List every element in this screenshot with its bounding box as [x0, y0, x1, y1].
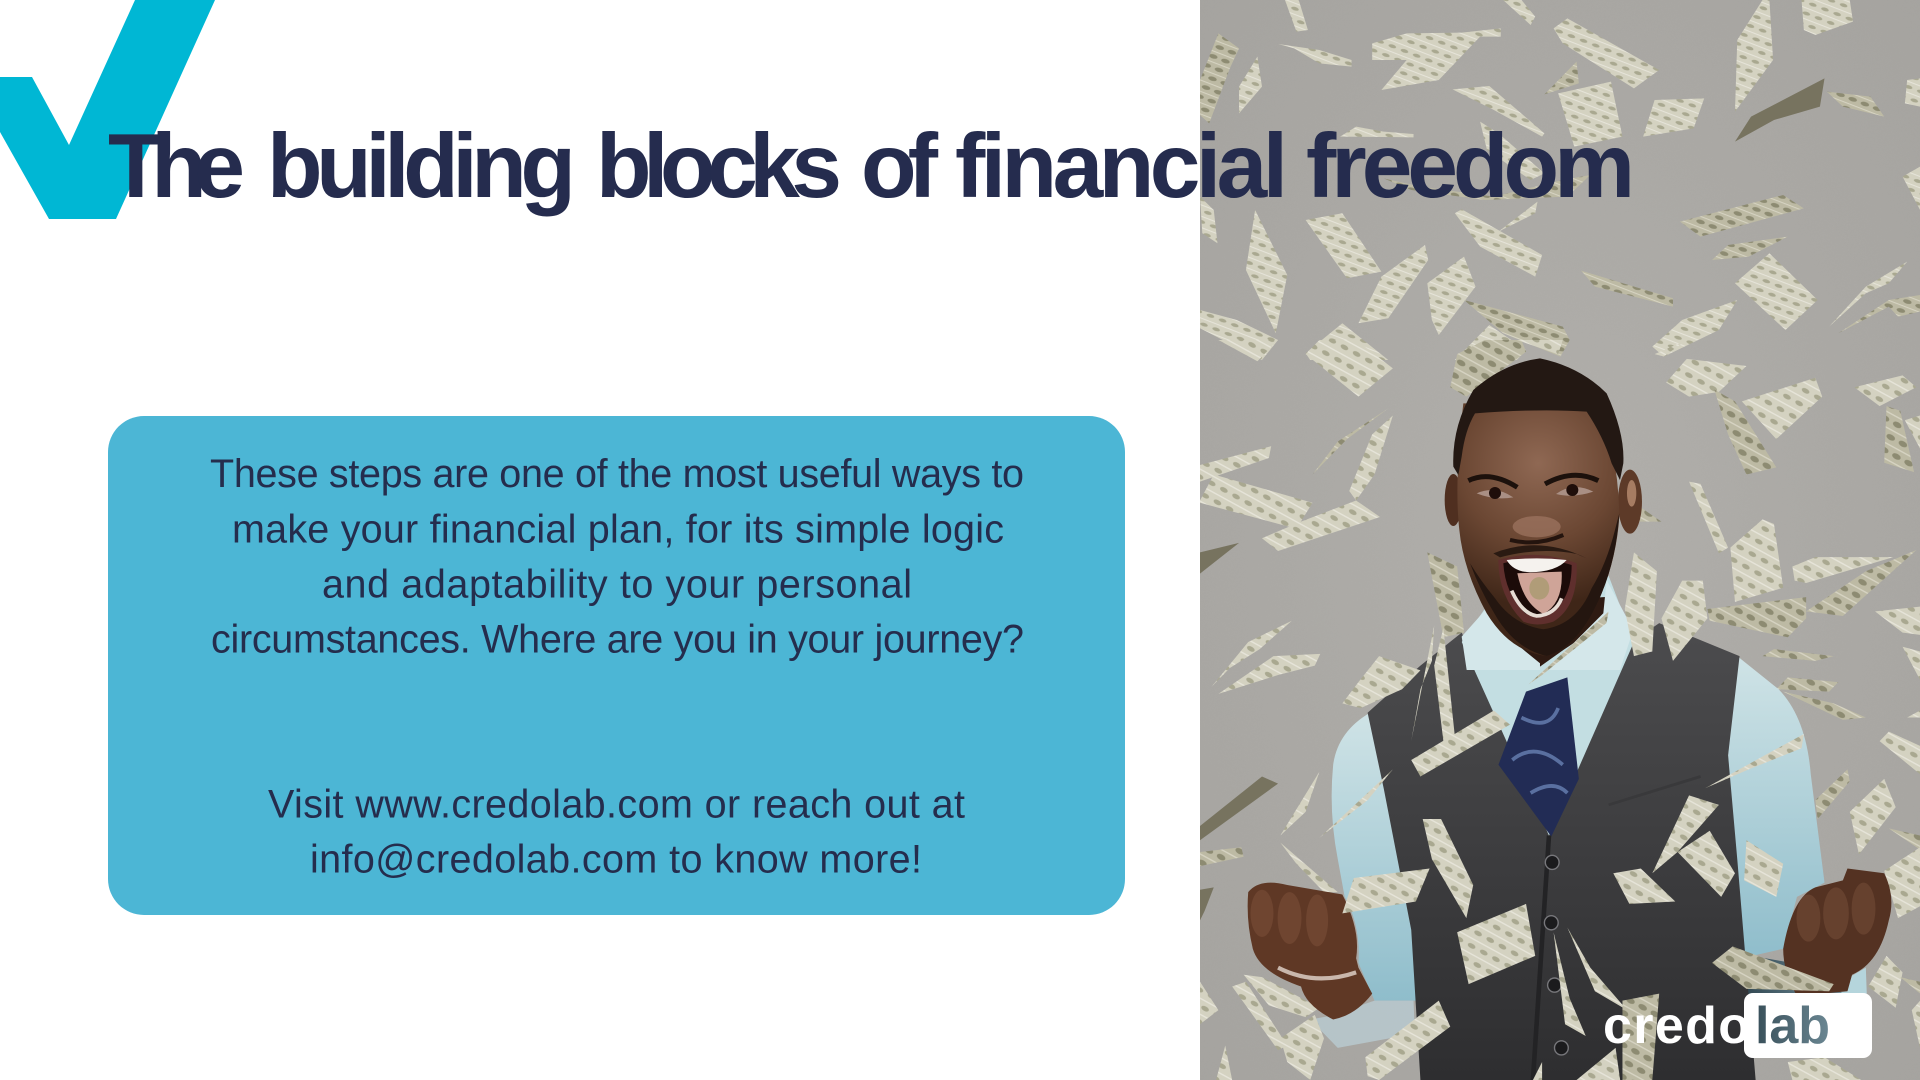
- right fist: [1783, 869, 1891, 996]
- body text paragraph: make your financial plan, for its simple logic: [232, 508, 1004, 552]
- body text paragraph: and adaptability to your personal: [322, 562, 912, 606]
- shirt collar area: [1462, 576, 1634, 835]
- title: The: [108, 116, 245, 217]
- right shirt sleeve: [1728, 656, 1825, 958]
- vest: [1368, 623, 1756, 1080]
- panel: photo of man under falling money: [1200, 0, 1920, 1080]
- body text paragraph: circumstances. Where are you in your journey?: [211, 618, 1024, 662]
- shirt collar: [1462, 580, 1633, 670]
- man: body with shirt, vest and tie: [1310, 576, 1867, 1080]
- concrete wall background: [1200, 0, 1920, 1080]
- ears: [1445, 470, 1642, 534]
- vest buttons: [1544, 855, 1568, 1055]
- hair: [1453, 358, 1623, 480]
- decorative check mark: [0, 0, 215, 219]
- contact text: Visit www.credolab.com or reach out at: [268, 782, 965, 826]
- left fist: [1248, 883, 1372, 1020]
- body text paragraph: These steps are one of the most useful ways to: [210, 452, 1024, 496]
- moustache: [1493, 545, 1587, 558]
- banknotes behind the man: [1200, 340, 1920, 1080]
- mouth: [1498, 555, 1577, 624]
- beard: [1470, 513, 1619, 656]
- logo badge with lab cut out: [1744, 993, 1872, 1058]
- man: fists: [1248, 869, 1891, 1020]
- eyes and eyebrows: [1468, 475, 1598, 499]
- right cuff: [1834, 968, 1867, 994]
- title: blocks: [596, 116, 842, 217]
- logo word credo: credo: [1603, 997, 1750, 1055]
- man: head with open shouting mouth: [1445, 358, 1642, 670]
- face: [1457, 403, 1619, 656]
- shaded shirt at hip: [1737, 953, 1847, 1053]
- panel: text box: [108, 416, 1125, 915]
- left shirt sleeve: [1332, 713, 1420, 1001]
- left cuff: [1310, 1001, 1415, 1048]
- contact text: [268, 782, 965, 882]
- title: financial: [955, 116, 1288, 217]
- tie pattern: [1512, 708, 1567, 793]
- nose: [1510, 516, 1563, 542]
- logo: credolab: [1603, 993, 1872, 1058]
- necktie: [1498, 677, 1579, 836]
- contact text: info@credolab.com to know more!: [310, 838, 922, 882]
- title: [108, 116, 1635, 217]
- title: freedom: [1306, 116, 1635, 217]
- neck: [1483, 597, 1613, 667]
- banknotes upper area: [1200, 0, 1920, 360]
- vest front seam: [1533, 835, 1549, 1080]
- title: building: [267, 116, 576, 217]
- text box background: [108, 416, 1125, 915]
- banknotes in front of the man: [1280, 552, 1834, 1080]
- title: of: [861, 116, 939, 217]
- body text paragraph: [210, 452, 1024, 662]
- vest pocket: [1609, 777, 1701, 805]
